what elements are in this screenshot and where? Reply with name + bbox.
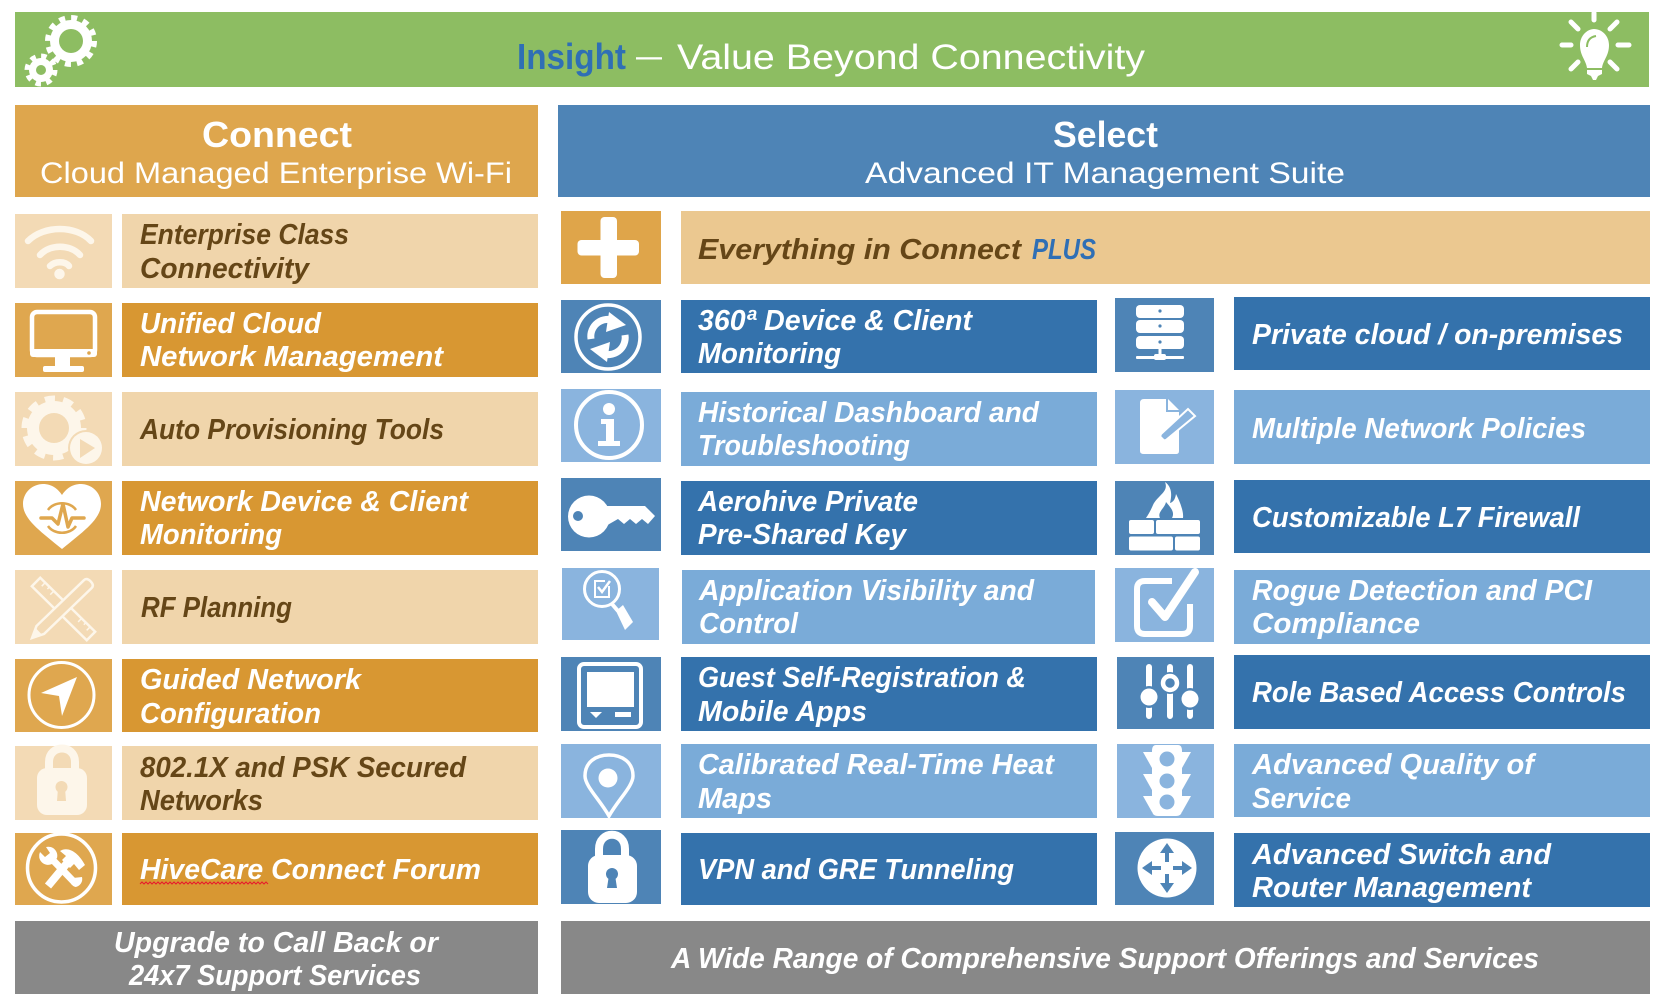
label: Calibrated Real-Time Heat — [698, 749, 1055, 781]
row: 360 Device & Client Monitoring — [561, 300, 1097, 373]
row: Unified Cloud Network Management — [15, 303, 538, 377]
label: Monitoring — [140, 519, 282, 551]
label — [140, 752, 467, 817]
row: Everything in Connect PLUS — [561, 211, 1650, 284]
row: VPN and GRE Tunneling — [561, 830, 1097, 905]
label: Monitoring — [698, 338, 841, 370]
icon: info — [576, 392, 642, 458]
footer: support upgrade: 24x7 Support Services — [128, 960, 421, 992]
icon: refresh circle — [576, 305, 640, 369]
label: Historical Dashboard and — [698, 397, 1040, 429]
header: Connect: Cloud Managed Enterprise Wi-Fi — [40, 157, 512, 190]
label: Application Visibility and — [698, 575, 1035, 607]
icon: magnifier — [584, 572, 633, 630]
panel: Select column — [558, 105, 1650, 994]
icon: document and pencil — [1140, 399, 1195, 454]
icon: checkbox — [1137, 572, 1195, 634]
label: HiveCare Connect Forum — [140, 854, 481, 886]
row: Rogue Detection and PCI Compliance — [1115, 568, 1650, 644]
row: Role Based Access Controls — [1117, 655, 1650, 729]
row: Auto Provisioning Tools — [15, 392, 538, 466]
heading: Value Beyond Connectivity: Value Beyond Connectivity — [677, 38, 1146, 77]
label: Connectivity — [140, 253, 311, 285]
label: Guest Self-Registration & — [698, 662, 1026, 694]
icon: gear and play — [25, 399, 104, 466]
header: Select — [558, 105, 1650, 197]
label: Network Device & Client — [140, 486, 469, 518]
icon: monitor — [30, 312, 97, 372]
row: Multiple Network Policies — [1115, 390, 1650, 464]
label: Troubleshooting — [698, 430, 910, 462]
heading: dash: — — [636, 37, 662, 75]
label: Everything in Connect — [698, 234, 1022, 266]
label — [140, 219, 349, 285]
title banner — [15, 12, 1649, 87]
icon: gears — [27, 18, 94, 84]
icon: server — [1136, 305, 1184, 360]
label: Advanced Switch and — [1251, 839, 1552, 871]
row: Advanced Switch and Router Management — [1115, 832, 1650, 907]
label: Network Management — [140, 341, 444, 373]
label — [698, 397, 1040, 462]
label: 360ª Device & Client — [698, 305, 973, 337]
label: Unified Cloud — [140, 308, 322, 340]
row: Customizable L7 Firewall — [1115, 480, 1650, 555]
label: Service — [1252, 783, 1351, 815]
icon: padlock — [37, 748, 87, 815]
icon: ruler and pencil — [28, 577, 95, 642]
label: Private cloud / on-premises — [1252, 319, 1623, 351]
row: Historical Dashboard and Troubleshooting — [561, 389, 1097, 466]
icon: light bulb — [1562, 13, 1629, 80]
label: RF Planning — [141, 592, 292, 624]
row: 802.1X and PSK Secured Networks — [15, 746, 538, 820]
icon: tools — [28, 834, 96, 902]
row: Calibrated Real-Time Heat Maps — [561, 744, 1097, 818]
footer: support offerings — [561, 921, 1650, 994]
label: 802.1X and PSK Secured — [140, 752, 467, 784]
label: VPN and GRE Tunneling — [698, 854, 1014, 886]
icon: tablet — [579, 664, 641, 727]
label: Customizable L7 Firewall — [1252, 502, 1581, 534]
label — [698, 575, 1035, 640]
icon: sliders — [1138, 667, 1201, 716]
label: Control — [699, 608, 799, 640]
label: Aerohive Private — [697, 486, 918, 518]
heading: Insight: Insight — [517, 36, 626, 77]
row: RF Planning — [15, 570, 538, 644]
label: Auto Provisioning Tools — [139, 414, 444, 446]
icon: heart with pulse — [23, 484, 101, 549]
footer: support upgrade: Upgrade to Call Back or — [114, 927, 440, 959]
icon: traffic light — [1143, 745, 1191, 816]
label — [140, 308, 444, 373]
label: Networks — [140, 785, 263, 817]
label: Enterprise Class — [140, 219, 349, 251]
label: Pre-Shared Key — [698, 519, 908, 551]
label: Role Based Access Controls — [1252, 677, 1626, 709]
label — [140, 486, 469, 551]
label — [1252, 575, 1593, 640]
row: Application Visibility and Control — [562, 568, 1095, 644]
label — [697, 486, 918, 551]
icon: router — [1138, 838, 1196, 898]
label — [698, 305, 973, 370]
footer: support upgrade — [15, 921, 538, 994]
row: Network Device & Client Monitoring — [15, 481, 538, 555]
label: Multiple Network Policies — [1252, 413, 1586, 445]
label: Mobile Apps — [698, 696, 867, 728]
row: HiveCare Connect Forum — [15, 833, 538, 905]
label: Maps — [698, 783, 772, 815]
icon: key — [568, 496, 655, 538]
row: Advanced Quality of Service — [1117, 744, 1650, 818]
icon: wifi — [28, 229, 91, 276]
label: Advanced Quality of — [1251, 749, 1537, 781]
label — [1251, 839, 1552, 904]
label: Guided Network — [140, 664, 363, 696]
header: Connect: Connect — [202, 114, 352, 155]
label: Compliance — [1252, 608, 1420, 640]
row: Guest Self-Registration & Mobile Apps — [561, 657, 1097, 731]
label — [1251, 749, 1537, 815]
header: Select: Advanced IT Management Suite — [865, 157, 1345, 190]
icon: map pin — [585, 755, 633, 816]
icon: firewall — [1129, 482, 1200, 550]
icon: padlock — [588, 835, 637, 903]
row: Enterprise Class Connectivity — [15, 214, 538, 288]
label: PLUS — [1032, 234, 1097, 266]
label: Configuration — [140, 698, 321, 730]
footer: support offerings: A Wide Range of Comprehensive Support Offerings and Services — [670, 943, 1539, 975]
label: Router Management — [1252, 872, 1532, 904]
icon: compass arrow — [29, 662, 94, 728]
header: Select: Select — [1053, 114, 1158, 155]
header: Connect — [15, 105, 538, 197]
row: Private cloud / on-premises — [1115, 297, 1650, 372]
panel: Connect column — [15, 105, 538, 994]
label: Rogue Detection and PCI — [1252, 575, 1593, 607]
icon: plus — [578, 217, 639, 278]
row: Guided Network Configuration — [15, 659, 538, 732]
label — [698, 662, 1026, 728]
row: Aerohive Private Pre-Shared Key — [561, 478, 1097, 555]
label — [140, 664, 363, 730]
label — [698, 749, 1055, 815]
